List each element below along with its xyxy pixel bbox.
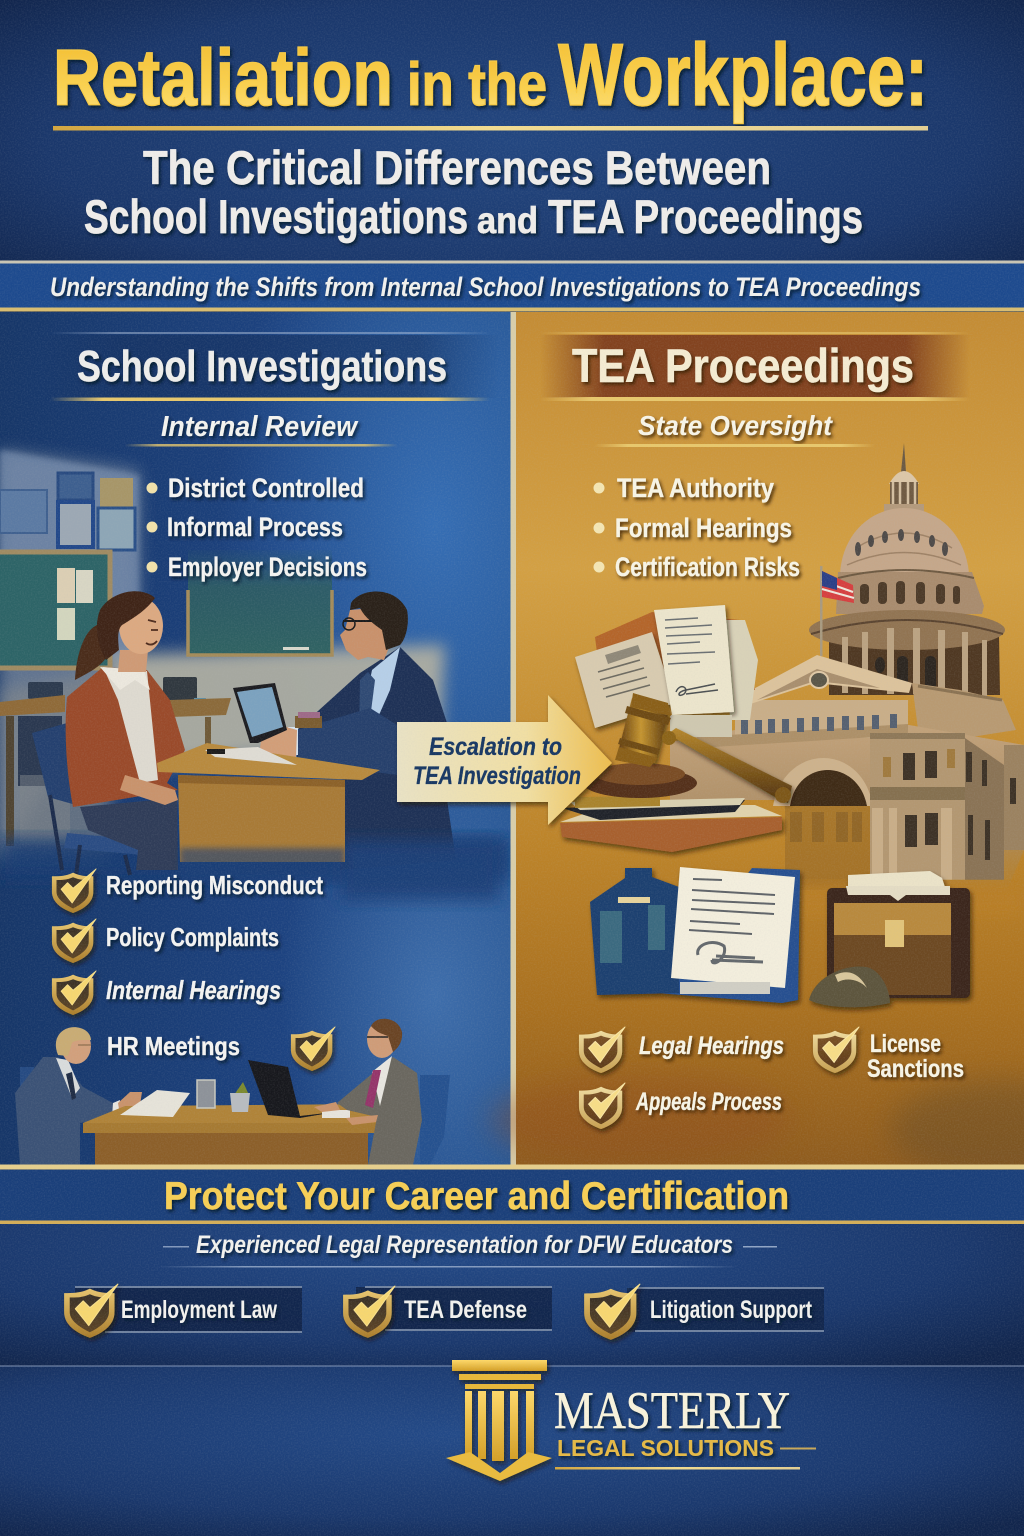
man in navy suit [260,591,500,900]
panel: TEA Proceedings [397,312,1024,1180]
service badge: Litigation Support [584,1284,824,1340]
Texas Capitol illustration [670,443,1024,915]
title [53,25,928,124]
subtitle: The Critical Differences Between [143,141,771,194]
subtitle: School Investigations [84,190,468,243]
right bullet list: TEA Authority [617,473,774,503]
right checklist: Sanctions [867,1055,964,1083]
escalation arrow: Escalation to [429,733,562,761]
right checklist [579,1027,964,1129]
left bullet list: Employer Decisions [168,552,367,582]
logo: Masterly Legal Solutions: LEGAL SOLUTIONS [557,1435,774,1461]
chalkboards [0,550,332,668]
right panel heading [540,332,970,447]
briefcase and gavel rest [809,871,970,1007]
classroom illustration [0,450,510,900]
right panel heading: TEA Proceedings [572,339,914,392]
footer heading: Protect Your Career and Certification [164,1175,789,1218]
HR meeting illustration [15,1019,450,1165]
service badge: Litigation Support: Litigation Support [650,1296,813,1324]
title: Workplace: [558,25,928,124]
right bullet list [594,473,800,582]
service badge: TEA Defense [343,1286,552,1338]
left panel heading [40,332,500,446]
logo: Masterly Legal Solutions [446,1360,816,1481]
classroom wall and windows [0,450,445,860]
footer tagline: Experienced Legal Representation for DFW Educators [196,1231,733,1259]
background desks and chairs [0,677,231,846]
left checklist: HR Meetings [107,1031,240,1061]
title: in the [407,51,547,118]
background: top header [0,0,1024,312]
subtitle: TEA Proceedings [548,190,863,243]
escalation arrow: TEA Investigation [413,762,581,790]
escalation arrow [397,695,612,825]
floor shadow [0,838,510,880]
gavel on stacked books [560,693,792,852]
logo pillar icon [446,1360,552,1481]
right checklist: Appeals Process [635,1088,782,1116]
subheading band [0,260,1024,312]
robe and signed document [590,867,800,1003]
right bullet list: Formal Hearings [615,513,792,543]
left checklist: Internal Hearings [106,975,281,1005]
desk with book, frame, plant and laptop [83,1060,389,1165]
service badge: Employment Law: Employment Law [121,1296,277,1324]
left panel heading: Internal Review [161,411,359,443]
American flag [820,566,854,656]
right bullet list: Certification Risks [615,552,800,582]
service badge: TEA Defense: TEA Defense [404,1296,527,1324]
panel divider [510,312,516,1166]
stacked documents [575,605,758,737]
left checklist [52,869,335,1071]
footer heading [0,1164,1024,1224]
right panel heading: State Oversight [638,410,834,441]
left checklist: Policy Complaints [106,922,279,952]
person with magenta tie [314,1019,450,1165]
subtitle: and [477,200,538,241]
panel: School Investigations [0,312,511,1166]
logo: Masterly Legal Solutions: MASTERLY [554,1382,790,1440]
left panel heading: School Investigations [77,342,447,391]
service badge: Employment Law [64,1284,302,1338]
woman in red cardigan [32,591,185,875]
left bullet list: District Controlled [168,473,364,503]
desk and laptop [157,683,380,882]
capitol building [670,655,1024,915]
older man [15,1027,142,1165]
subtitle [84,141,863,243]
rotunda dome [809,443,1016,745]
left bullet list: Informal Process [167,512,343,542]
footer background [0,1166,1024,1536]
left checklist: Reporting Misconduct [106,870,323,900]
right checklist: Legal Hearings [639,1032,784,1060]
right checklist: License [870,1030,941,1058]
title: Retaliation [53,33,393,122]
left bullet list [146,473,367,582]
